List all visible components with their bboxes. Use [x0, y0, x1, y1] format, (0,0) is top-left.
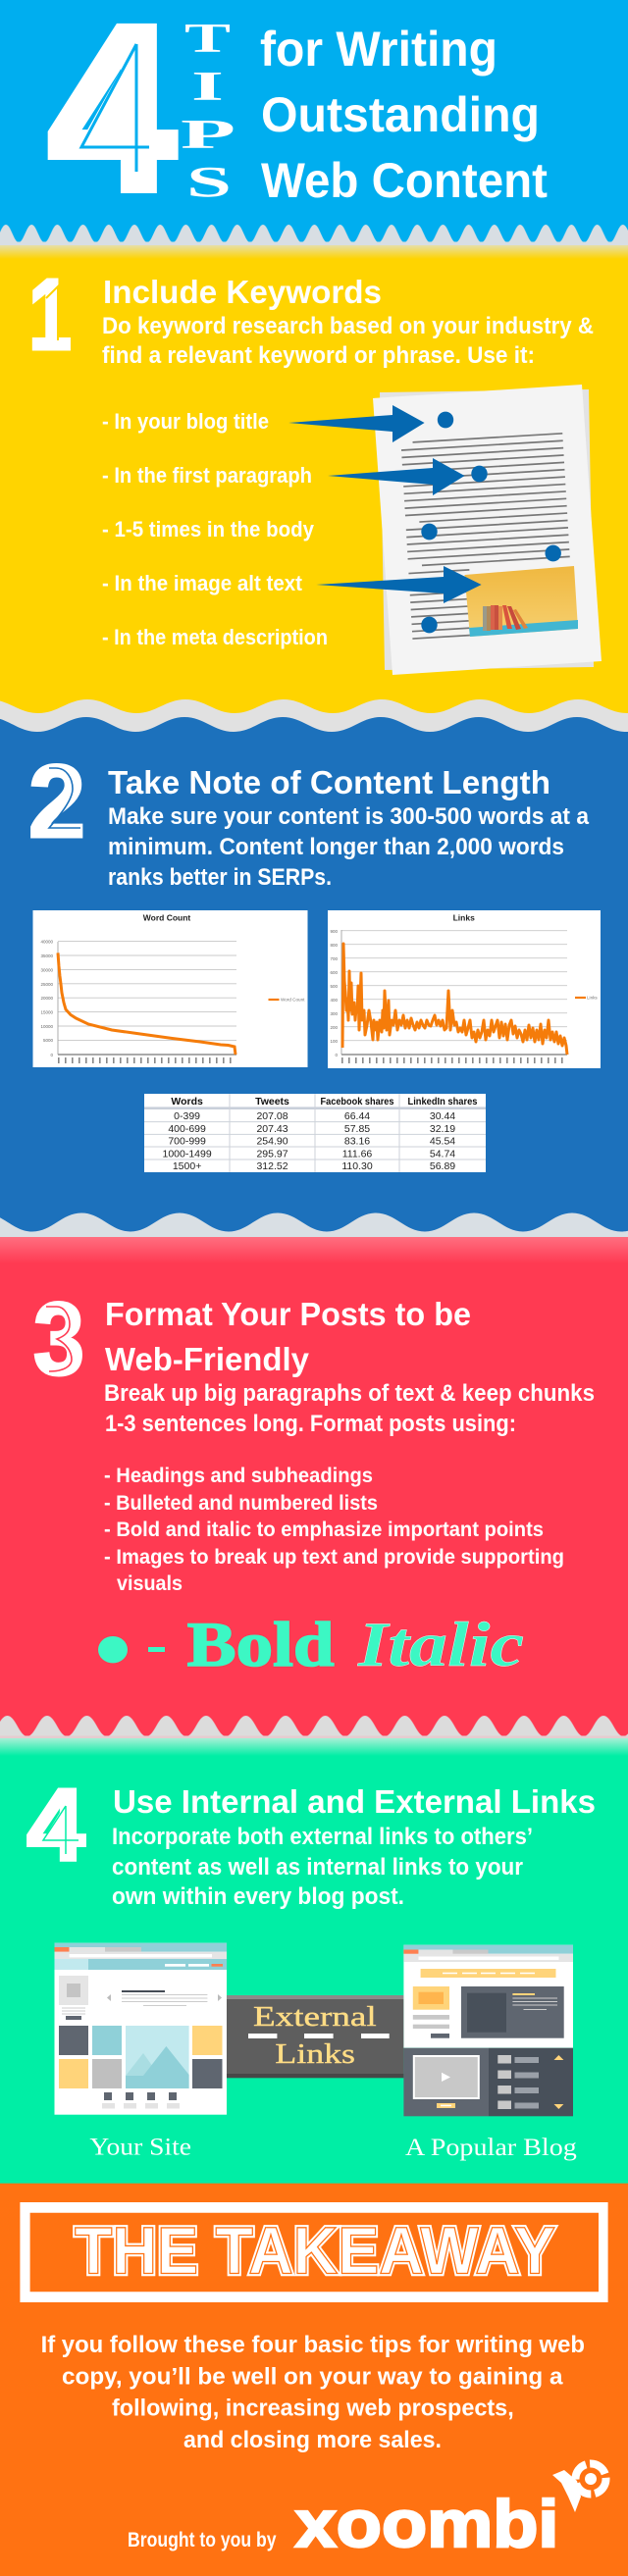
- table: shares by word count: 1500+: [173, 1160, 201, 1172]
- table: shares by word count: 0-399: [174, 1110, 200, 1122]
- chart: links: 300: [330, 1011, 338, 1016]
- chart: links: Links: [587, 995, 598, 1001]
- table: shares by word count: Facebook shares: [320, 1096, 394, 1108]
- body text: 1-3 sentences long. Format posts using:: [105, 1411, 516, 1437]
- formatting list: - Headings and subheadings: [104, 1465, 373, 1487]
- title text: for Writing: [260, 22, 497, 77]
- chart: links: 500: [330, 984, 338, 989]
- table: shares by word count: 30.44: [430, 1110, 455, 1122]
- takeaway title box: [20, 2202, 608, 2302]
- table: shares by word count: 254.90: [256, 1136, 288, 1148]
- illustration: external links sign: [227, 1995, 403, 2078]
- chart: word count: 35000: [40, 953, 53, 958]
- chart: links: [328, 910, 601, 1068]
- takeaway body text: [41, 2332, 585, 2453]
- formatting list: - Bulleted and numbered lists: [104, 1492, 378, 1515]
- table: shares by word count: LinkedIn shares: [408, 1096, 478, 1108]
- table: shares by word count: 83.16: [344, 1136, 370, 1148]
- numeral 3: 3: [33, 1282, 84, 1397]
- keyword dots: [421, 412, 561, 633]
- label: your site: Your Site: [89, 2135, 191, 2161]
- bold italic example: [98, 1610, 524, 1680]
- panel: tip 3 format posts: [0, 1237, 628, 1738]
- numeral 4: 4: [26, 1768, 85, 1882]
- panel: tip 1 include keywords: [0, 225, 628, 736]
- chart: links: 200: [330, 1025, 338, 1030]
- photo of books: [465, 566, 578, 637]
- title text: Outstanding: [261, 87, 540, 142]
- label: a popular blog: A Popular Blog: [405, 2135, 577, 2161]
- title word TIPS stacked: P: [181, 113, 236, 158]
- chart: links: 100: [330, 1039, 338, 1044]
- title word TIPS stacked: [181, 17, 236, 206]
- table: shares by word count: Words: [171, 1096, 203, 1108]
- illustration: external links sign: Links: [275, 2038, 355, 2070]
- takeaway title box: THE TAKEAWAY: [75, 2213, 555, 2288]
- table: shares by word count: 295.97: [256, 1148, 288, 1159]
- panel: header: [0, 0, 628, 245]
- title word TIPS stacked: I: [191, 65, 224, 110]
- body text: own within every blog post.: [112, 1883, 404, 1910]
- body text: minimum. Content longer than 2,000 words: [108, 834, 564, 860]
- body text: [112, 1824, 533, 1910]
- body text: ranks better in SERPs.: [108, 864, 332, 891]
- keyword placement list: - In the first paragraph: [102, 463, 312, 488]
- logo: xoombi: xoombi: [295, 2487, 558, 2561]
- numeral 2: 2: [28, 745, 85, 859]
- chart: word count: 30000: [40, 967, 53, 973]
- chart: links: 600: [330, 970, 338, 975]
- heading: [105, 1296, 471, 1377]
- table: shares by word count: 66.44: [344, 1110, 370, 1122]
- panel: tip 2 content length: [0, 717, 628, 1238]
- keyword placement list: - In your blog title: [102, 409, 269, 434]
- heading: Take Note of Content Length: [108, 764, 550, 800]
- logo: xoombi: [295, 2464, 606, 2561]
- heading: Include Keywords: [103, 274, 382, 310]
- chart: links: 800: [330, 943, 338, 948]
- table: shares by word count: 207.08: [256, 1110, 288, 1122]
- heading: Format Your Posts to be: [105, 1296, 471, 1332]
- heading: Web-Friendly: [105, 1341, 310, 1377]
- wave divider: blue to red: [0, 1212, 628, 1240]
- table: shares by word count: 700-999: [168, 1136, 206, 1148]
- arrow: blog title: [288, 405, 425, 442]
- formatting list: visuals: [117, 1572, 183, 1595]
- table: shares by word count: 32.19: [430, 1123, 455, 1135]
- chart: links: 0: [335, 1053, 338, 1057]
- takeaway body text: and closing more sales.: [183, 2427, 442, 2453]
- formatting list: [104, 1465, 564, 1595]
- table: shares by word count: 400-699: [168, 1123, 206, 1135]
- wave divider: yellow to blue: [0, 699, 628, 755]
- chart: word count: 10000: [40, 1024, 53, 1029]
- takeaway body text: copy, you’ll be well on your way to gaining a: [62, 2364, 563, 2391]
- chart: links: 700: [330, 956, 338, 961]
- body text: [108, 803, 590, 891]
- takeaway body text: If you follow these four basic tips for writing web: [41, 2332, 585, 2358]
- table: shares by word count: 56.89: [430, 1160, 455, 1172]
- keyword placement list: [102, 409, 328, 649]
- credit line: Brought to you by: [128, 2529, 277, 2551]
- keyword placement list: - 1-5 times in the body: [102, 517, 315, 541]
- title text: Web Content: [261, 153, 548, 208]
- title word TIPS stacked: S: [186, 158, 232, 206]
- body text: Incorporate both external links to others’: [112, 1824, 533, 1850]
- body text: find a relevant keyword or phrase. Use it:: [102, 342, 535, 369]
- table: shares by word count: 57.85: [344, 1123, 370, 1135]
- illustration: popular blog browser: [403, 1945, 573, 2116]
- formatting list: - Bold and italic to emphasize important points: [104, 1519, 544, 1541]
- bold italic example: Bold: [187, 1610, 335, 1680]
- keyword placement list: - In the image alt text: [102, 571, 303, 595]
- table: shares by word count: 110.30: [341, 1160, 373, 1172]
- numeral 1: 1: [28, 258, 72, 371]
- table: shares by word count: 45.54: [430, 1136, 455, 1148]
- arrow: first paragraph: [328, 458, 465, 495]
- keyword placement list: - In the meta description: [102, 625, 328, 649]
- formatting list: - Images to break up text and provide supporting: [104, 1546, 564, 1569]
- chart: word count: 15000: [40, 1010, 53, 1014]
- chart: word count: 5000: [43, 1038, 53, 1043]
- illustration: document page: [373, 385, 602, 675]
- title text: [260, 22, 548, 208]
- body text: Do keyword research based on your industry &: [102, 313, 594, 339]
- chart: word count: 0: [50, 1053, 53, 1057]
- heading: Use Internal and External Links: [113, 1783, 596, 1820]
- table: shares by word count: Tweets: [255, 1096, 289, 1108]
- table: shares by word count: 207.43: [256, 1123, 288, 1135]
- arrow: image alt text: [316, 566, 482, 603]
- chart: word count: Word Count: [281, 997, 305, 1003]
- body text: Make sure your content is 300-500 words at a: [108, 803, 590, 830]
- body text: [102, 313, 594, 369]
- chart: links: 400: [330, 998, 338, 1003]
- chart: links: 900: [330, 929, 338, 934]
- takeaway body text: following, increasing web prospects,: [112, 2396, 514, 2422]
- panel: the takeaway: [0, 2184, 628, 2576]
- body text: content as well as internal links to your: [112, 1854, 523, 1880]
- chart: word count: Word Count: [143, 912, 190, 922]
- body text: Break up big paragraphs of text & keep chunks: [104, 1380, 595, 1407]
- body text: [104, 1380, 595, 1437]
- chart: word count: 25000: [40, 982, 53, 987]
- chart: word count: 40000: [40, 940, 53, 944]
- takeaway title box: THE TAKEAWAY: [75, 2213, 555, 2288]
- illustration: your site browser: [55, 1943, 227, 2115]
- illustration: external links sign: External: [253, 2001, 377, 2033]
- table: shares by word count: [144, 1094, 486, 1172]
- table: shares by word count: 312.52: [256, 1160, 288, 1172]
- chart: links: Links: [453, 912, 475, 922]
- table: shares by word count: 54.74: [430, 1148, 455, 1159]
- table: shares by word count: 111.66: [342, 1148, 372, 1159]
- panel: tip 4 links: [0, 1716, 628, 2184]
- title word TIPS stacked: T: [184, 17, 231, 62]
- chart: word count: [33, 910, 308, 1067]
- bold italic example: Italic: [357, 1610, 524, 1680]
- table: shares by word count: 1000-1499: [162, 1148, 212, 1159]
- chart: word count: 20000: [40, 996, 53, 1001]
